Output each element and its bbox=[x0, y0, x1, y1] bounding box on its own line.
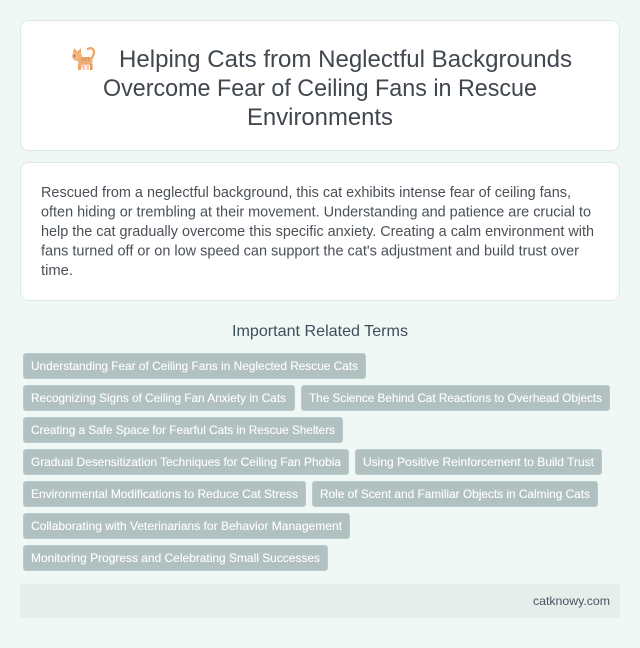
tag: Environmental Modifications to Reduce Cat Stress bbox=[31, 487, 298, 501]
icon: cat bbox=[72, 48, 94, 70]
tag: Using Positive Reinforcement to Build Trust bbox=[363, 455, 595, 469]
text block: description: often hiding or trembling at their movement. Understanding and patience are crucial to bbox=[41, 204, 591, 220]
tag bbox=[24, 418, 342, 442]
tag: Gradual Desensitization Techniques for Ceiling Fan Phobia bbox=[31, 455, 341, 469]
text block: description: time. bbox=[41, 263, 73, 279]
tag bbox=[24, 354, 366, 378]
tag list bbox=[24, 354, 610, 570]
footer: catknowy.com bbox=[533, 594, 610, 608]
tag: Recognizing Signs of Ceiling Fan Anxiety in Cats bbox=[31, 391, 286, 405]
tag: Creating a Safe Space for Fearful Cats in Rescue Shelters bbox=[31, 423, 335, 437]
tag: Collaborating with Veterinarians for Behavior Management bbox=[31, 519, 343, 533]
heading: title bbox=[103, 46, 572, 131]
tag bbox=[356, 450, 602, 474]
tag bbox=[302, 386, 610, 410]
heading: important related terms: Important Related Terms bbox=[232, 323, 408, 340]
tag bbox=[24, 546, 328, 570]
tag bbox=[24, 386, 294, 410]
tag: Role of Scent and Familiar Objects in Calming Cats bbox=[320, 487, 590, 501]
tag bbox=[24, 482, 306, 506]
panel: title card bbox=[20, 20, 620, 150]
tag: The Science Behind Cat Reactions to Overhead Objects bbox=[309, 391, 602, 405]
heading: title: Helping Cats from Neglectful Backgrounds bbox=[119, 46, 572, 73]
text block: description: Rescued from a neglectful background, this cat exhibits intense fear of ceiling fans, bbox=[41, 185, 571, 201]
text block: description: help the cat gradually overcome this specific anxiety. Creating a calm environment with bbox=[41, 224, 594, 240]
heading: title: Environments bbox=[247, 104, 393, 131]
tag bbox=[24, 514, 350, 538]
text block: description bbox=[41, 185, 594, 279]
tag: Understanding Fear of Ceiling Fans in Neglected Rescue Cats bbox=[31, 359, 358, 373]
tag bbox=[312, 482, 598, 506]
panel: description bbox=[20, 162, 620, 300]
tag: Monitoring Progress and Celebrating Small Successes bbox=[31, 551, 320, 565]
footer bbox=[20, 584, 620, 618]
heading: title: Overcome Fear of Ceiling Fans in Rescue bbox=[103, 75, 537, 102]
tag bbox=[24, 450, 348, 474]
text block: description: fans turned off or on low speed can support the cat's adjustment and build trust over bbox=[41, 244, 579, 260]
